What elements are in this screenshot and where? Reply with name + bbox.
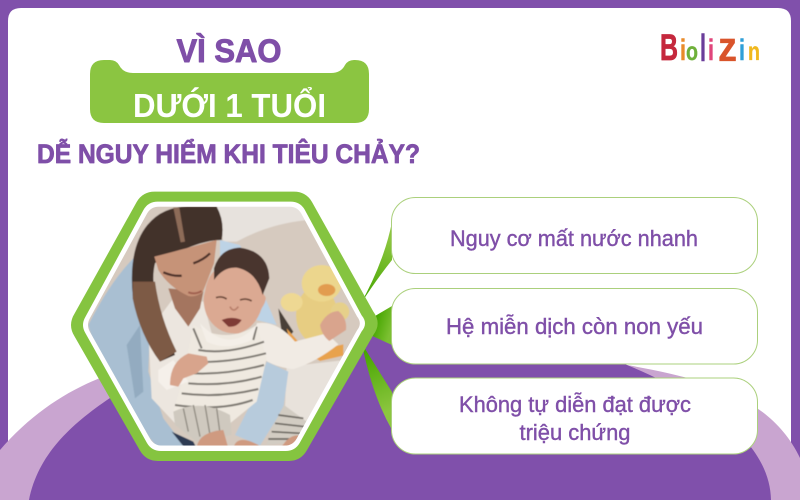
baby sleeve over duck [282, 329, 336, 360]
heading: dễ nguy hiểm khi tiêu chảy: DỄ NGUY HIỂM KHI TIÊU CHẢY? [37, 137, 420, 169]
connector: middle [368, 306, 392, 345]
hair [132, 207, 223, 362]
card: không tự diễn đạt được triệu chứng [392, 378, 758, 454]
baby right sleeve [282, 329, 288, 334]
baby hand raised [320, 311, 346, 341]
white inner hexagon [83, 202, 365, 451]
photo background sofa [88, 206, 360, 446]
mother jeans arm [235, 362, 288, 446]
baby stripes [175, 327, 266, 407]
logo: Biolizin: i [708, 34, 714, 67]
light purple arc [0, 340, 800, 500]
connector fans [360, 222, 392, 430]
hexagon photo frame [71, 192, 378, 461]
neck [168, 288, 203, 327]
logo: Biolizin: o [686, 36, 698, 66]
cardigan [88, 257, 185, 447]
card: không tự diễn đạt được triệu chứng: triệu chứng [520, 420, 630, 445]
white shirt [148, 300, 212, 422]
baby collar [202, 326, 256, 337]
green hexagon [71, 192, 378, 461]
logo: Biolizin: z [718, 23, 737, 70]
logo: Biolizin: i [739, 34, 745, 67]
logo: Biolizin [660, 23, 760, 70]
heading: vì sao: VÌ SAO [176, 33, 282, 69]
card: không tự diễn đạt được triệu chứng: Không tự diễn đạt được [459, 392, 691, 417]
connector: bottom [362, 344, 392, 430]
title [37, 33, 420, 169]
connector: top [360, 222, 392, 305]
logo: Biolizin: B [660, 27, 678, 68]
card: nguy cơ mất nước nhanh: Nguy cơ mất nước nhanh [450, 226, 698, 251]
green label tab [90, 60, 369, 123]
mother face [154, 240, 217, 296]
dark purple arc [29, 335, 771, 500]
shorts [173, 406, 231, 425]
baby head [204, 265, 266, 333]
logo: Biolizin: n [748, 36, 760, 66]
logo: Biolizin: i [680, 34, 686, 67]
card: hệ miễn dịch còn non yếu [392, 288, 758, 364]
duck toy [281, 265, 349, 361]
logo: Biolizin: l [700, 28, 706, 70]
legs [196, 430, 228, 446]
baby left cuff [158, 360, 188, 390]
card: hệ miễn dịch còn non yếu: Hệ miễn dịch còn non yếu [446, 314, 703, 339]
baby left hand [170, 353, 208, 387]
card: nguy cơ mất nước nhanh [392, 198, 758, 274]
baby body [187, 326, 266, 422]
heading: dưới 1 tuổi: DƯỚI 1 TUỔI [133, 87, 326, 124]
photo: mother holding crying baby [88, 206, 360, 446]
